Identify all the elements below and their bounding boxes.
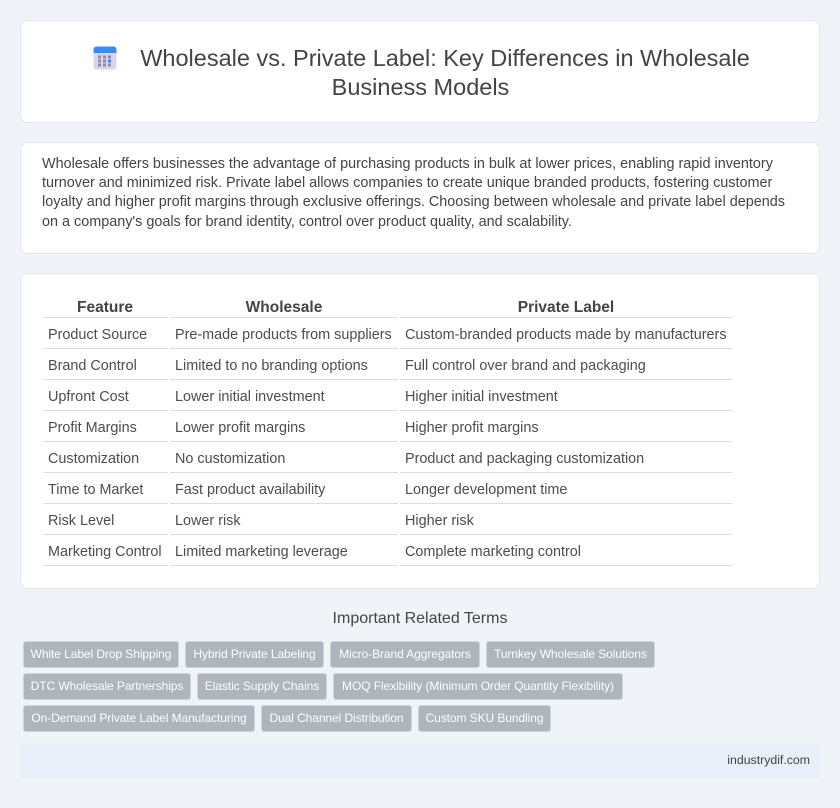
row: Marketing Control: Limited marketing leverage [175,544,348,560]
row: Marketing Control: Complete marketing control [405,544,581,560]
tag: MOQ Flexibility (Minimum Order Quantity Flexibility) [342,679,614,693]
row: Customization [48,451,644,467]
tag [330,641,480,668]
row: Brand Control: Limited to no branding options [175,358,368,374]
row: Risk Level [48,513,474,529]
tag group: related terms [23,641,655,732]
row: Time to Market: Longer development time [405,482,567,498]
row: Time to Market: Fast product availability [175,482,325,498]
row: Brand Control [48,358,646,374]
tag [185,641,324,668]
row: Upfront Cost [48,389,558,405]
row: Profit Margins: Profit Margins [48,420,137,436]
row: Upfront Cost: Higher initial investment [405,389,558,405]
panel: comparison table [20,273,820,589]
tag [23,673,191,700]
row: Risk Level: Risk Level [48,513,114,529]
row: Upfront Cost: Upfront Cost [48,389,129,405]
row: Product Source: Pre-made products from suppliers [175,327,392,343]
row: Product Source: Custom-branded products made by manufacturers [405,327,727,343]
tag [261,705,412,732]
row: Customization: Product and packaging customization [405,451,644,467]
tag: Dual Channel Distribution [269,711,404,725]
row: Time to Market: Time to Market [48,482,143,498]
panel: introduction [20,142,820,254]
tag [418,705,551,732]
tag: Elastic Supply Chains [205,679,319,693]
title: Wholesale vs. Private Label: Key Differences in Wholesale [140,45,750,71]
row: Profit Margins [48,420,539,436]
row: Upfront Cost: Lower initial investment [175,389,325,405]
title [140,45,750,100]
tag: White Label Drop Shipping [31,647,171,661]
footer text: industrydif.com [727,753,810,767]
tag [23,641,179,668]
header: Private Label: Private Label [518,299,614,316]
panel: header [20,20,820,123]
row: Risk Level: Lower risk [175,513,241,529]
tag: Hybrid Private Labeling [193,647,316,661]
row: Profit Margins: Lower profit margins [175,420,305,436]
header: Feature: Feature [77,299,133,316]
tag: On-Demand Private Label Manufacturing [31,711,247,725]
tag [333,673,623,700]
tag: DTC Wholesale Partnerships [31,679,183,693]
row: Customization: Customization [48,451,139,467]
tag [23,705,255,732]
row: Time to Market [48,482,567,498]
tag: Custom SKU Bundling [426,711,543,725]
comparison table [43,299,732,566]
text block: introduction: Wholesale offers businesses the advantage of purchasing products in bulk at lower prices, enabling rapid inventory turnover and minimized risk. Private label allows companies to create unique branded products, fostering customer loyalty and higher profit margins through exclusive offerings. Choosing between wholesale and private label depends on a company's goals for brand identity, control over product quality, and scalability. [42,156,785,230]
tag [197,673,327,700]
title: Business Models [332,74,509,100]
footer bar [20,744,820,778]
tag: Micro-Brand Aggregators [339,647,471,661]
row: Customization: No customization [175,451,285,467]
icon: calendar [94,46,116,70]
row: Product Source: Product Source [48,327,147,343]
row: Marketing Control [48,544,581,560]
heading: related terms: Important Related Terms [333,610,507,627]
row: Marketing Control: Marketing Control [48,544,162,560]
row: Product Source [48,327,727,343]
tag [486,641,655,668]
row: Profit Margins: Higher profit margins [405,420,539,436]
tag: Turnkey Wholesale Solutions [494,647,647,661]
row: Brand Control: Full control over brand and packaging [405,358,646,374]
row: Brand Control: Brand Control [48,358,137,374]
header: Wholesale: Wholesale [246,299,322,316]
row: Risk Level: Higher risk [405,513,474,529]
